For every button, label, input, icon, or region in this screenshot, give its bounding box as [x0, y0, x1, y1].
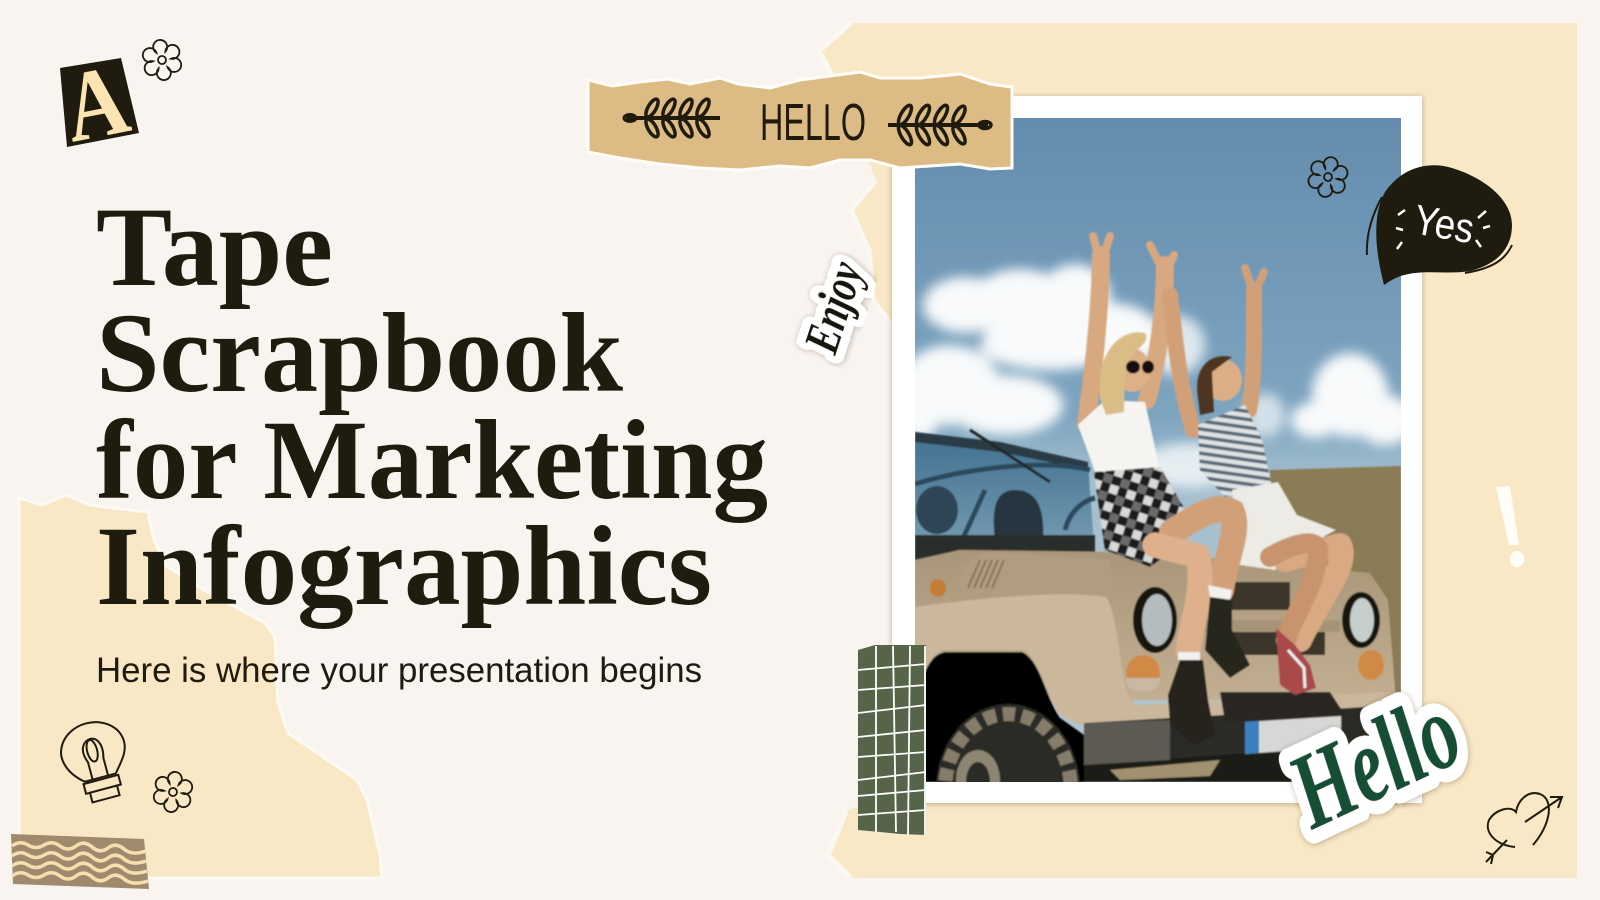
speech bubble: yes [1367, 165, 1512, 285]
icon: heart with arrow [1486, 793, 1562, 864]
winch [1219, 691, 1342, 716]
windscreen [915, 432, 1094, 536]
friend two: body [1198, 405, 1272, 497]
friend one: head [1124, 348, 1149, 393]
friend two: shorts [1232, 482, 1336, 570]
photo: two friends on a jeep [915, 118, 1401, 782]
hood [915, 550, 1396, 700]
headlights [1133, 587, 1177, 653]
front fender [915, 594, 1396, 725]
panel: torn cream paper left [19, 495, 382, 878]
icon: flower top left [141, 37, 183, 83]
letter tile A: A [55, 43, 137, 164]
icon: left leaf sprig [624, 97, 720, 139]
speech bubble: yes: Yes [1410, 196, 1478, 252]
title: for Marketing [96, 398, 768, 523]
friend two: arms [1170, 290, 1254, 430]
friend one: arms [1086, 255, 1165, 425]
sticker: enjoy: Enjoy [792, 254, 874, 360]
panel: torn cream paper right [819, 23, 1577, 878]
tape word hello: HELLO [760, 94, 866, 152]
indicator lights [1126, 654, 1160, 678]
legs [1172, 509, 1234, 590]
hill [1270, 466, 1401, 720]
title [96, 185, 768, 629]
friend two: head [1211, 359, 1243, 402]
icon: light bulb [55, 715, 137, 807]
icon: right leaf sprig [888, 103, 991, 147]
under bumper [1083, 750, 1292, 782]
socks and boots [1208, 585, 1232, 600]
sky [915, 118, 1401, 782]
grille [1230, 581, 1326, 656]
title: Infographics [96, 504, 712, 629]
bumper [1086, 706, 1369, 758]
clouds [898, 264, 1415, 487]
tyre [936, 703, 1080, 782]
seats [916, 486, 958, 534]
icon: flower bottom left [152, 769, 194, 815]
torn tape: hello [588, 72, 1012, 170]
sticker: hello: Hello [1271, 671, 1478, 852]
exclamation mark [1496, 486, 1524, 567]
title: Scrapbook [96, 291, 623, 416]
washi tape: green grid [858, 645, 926, 835]
washi tape: wavy [11, 834, 149, 889]
friend one: skirt [1094, 467, 1185, 567]
number plate [1245, 716, 1341, 754]
dashboard [915, 535, 1095, 560]
photo frame [892, 96, 1422, 876]
icon: flower on photo [1306, 153, 1350, 201]
wheel arch [915, 652, 1084, 782]
title: Tape [96, 185, 333, 310]
subtitle: Here is where your presentation begins [96, 651, 702, 690]
friend one: body [1078, 400, 1160, 472]
